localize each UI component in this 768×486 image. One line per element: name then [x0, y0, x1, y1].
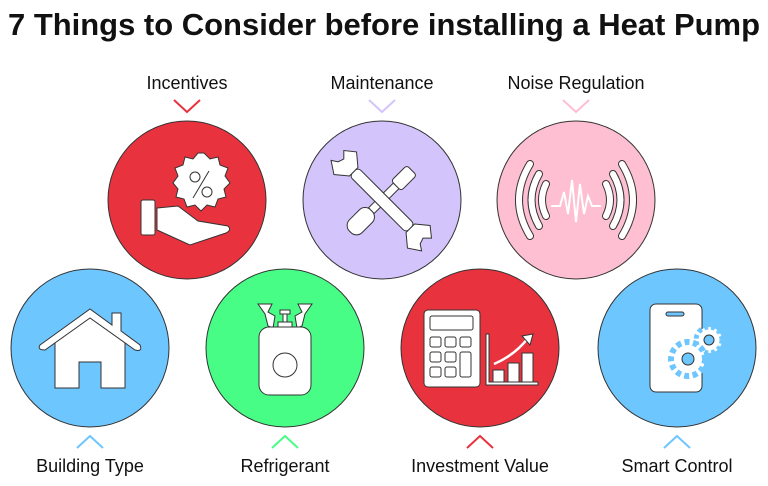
item: maintenance: [303, 73, 461, 279]
chevron: investment: [467, 436, 493, 448]
label: investment value: Investment Value: [411, 456, 549, 476]
item: refrigerant: [206, 269, 364, 476]
label: building type: Building Type: [36, 456, 144, 476]
label: incentives: Incentives: [146, 73, 228, 93]
item: noise regulation: [497, 73, 655, 279]
circle: investment: [401, 269, 559, 427]
circle: noise: [497, 121, 655, 279]
item: smart control: [598, 269, 756, 476]
chevron: incentives: [174, 100, 200, 112]
chevron: refrigerant: [272, 436, 298, 448]
item: building type: [11, 269, 169, 476]
icon: phone with gears: [650, 304, 722, 392]
title: 7 Things to Consider before installing a Heat Pump: [8, 7, 760, 42]
chevron: smart control: [664, 436, 690, 448]
icon: hand with percent badge: [141, 153, 230, 245]
chevron: maintenance: [369, 100, 395, 112]
icon: refrigerant tank: [258, 304, 312, 395]
label: smart control: Smart Control: [621, 456, 733, 476]
circle: incentives: [108, 121, 266, 279]
label: refrigerant: Refrigerant: [240, 456, 330, 476]
item: incentives: [108, 73, 266, 279]
circle: building: [11, 269, 169, 427]
chevron: building: [77, 436, 103, 448]
icon: calculator and growth chart: [424, 310, 538, 387]
label: maintenance: Maintenance: [330, 73, 434, 93]
circle: refrigerant: [206, 269, 364, 427]
icon: wrench and screwdriver: [325, 143, 439, 257]
circle: maintenance: [303, 121, 461, 279]
label: noise regulation: Noise Regulation: [507, 73, 645, 93]
chevron: noise: [563, 100, 589, 112]
icon: sound waves: [519, 164, 633, 236]
circle: smart control: [598, 269, 756, 427]
item: investment value: [401, 269, 559, 476]
icon: house: [39, 309, 141, 388]
